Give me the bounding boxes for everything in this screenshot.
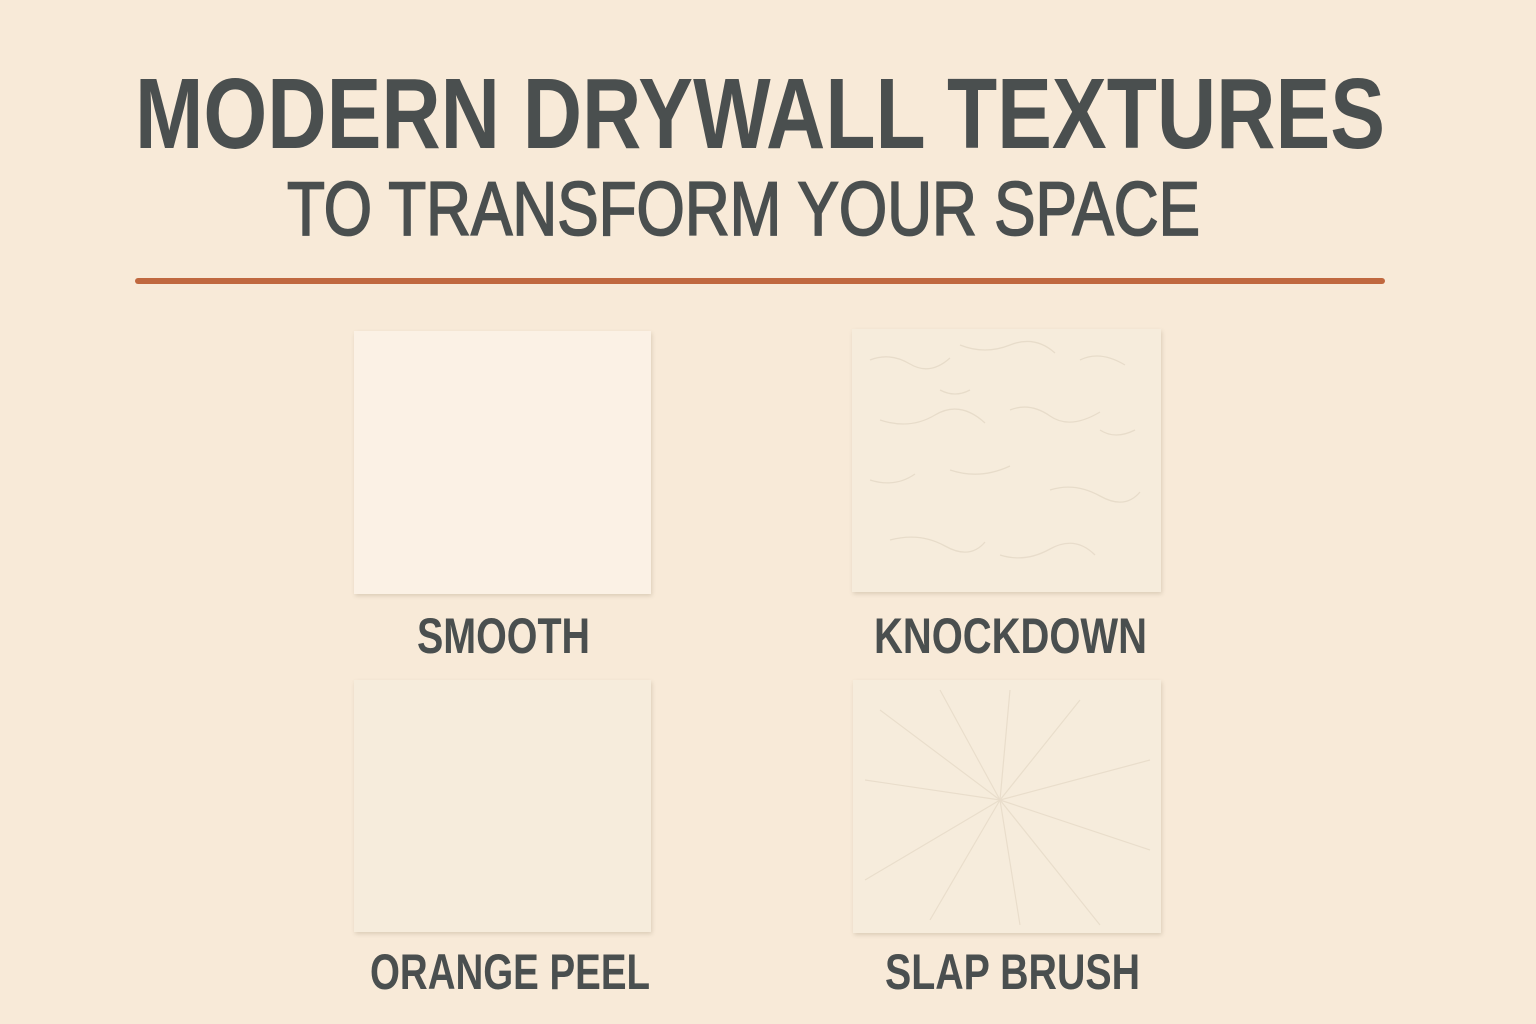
divider line: [135, 278, 1385, 284]
label: smooth: SMOOTH: [417, 608, 590, 664]
label: orange peel: ORANGE PEEL: [370, 944, 650, 1000]
tile: orange peel: [354, 680, 651, 1000]
tile: slap brush: [853, 680, 1161, 1000]
tile: smooth: [354, 331, 651, 664]
subtitle: TO TRANSFORM YOUR SPACE: [287, 167, 1200, 252]
tile: knockdown: [852, 329, 1161, 664]
label: knockdown: KNOCKDOWN: [874, 608, 1147, 664]
label: slap brush: SLAP BRUSH: [885, 944, 1140, 1000]
